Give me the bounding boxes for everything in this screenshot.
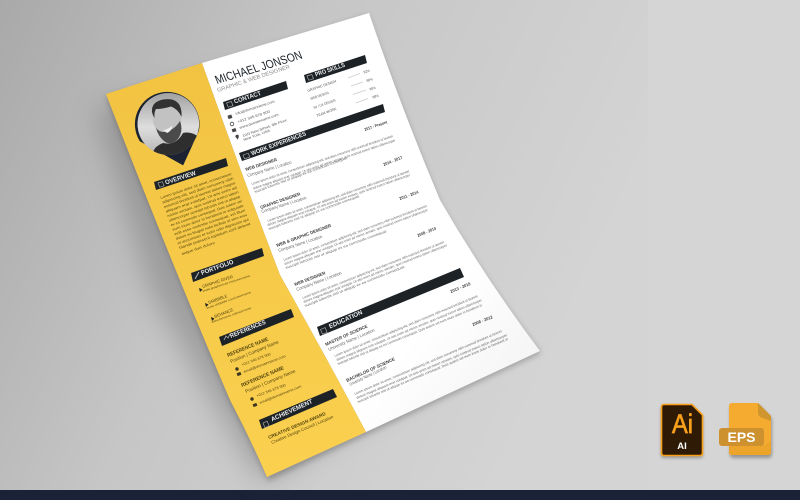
job 1: dolore magna aliquam erat volutpat. Ut wisi enim ad minim veniam, quis nostrud exerci tation ullamcorper	[252, 138, 397, 190]
reference 2	[241, 365, 302, 407]
sweater	[154, 132, 197, 155]
job 3: Company Name | Location	[278, 234, 323, 253]
job 3: dolore magna aliquam erat volutpat. Ut wisi enim ad minim veniam, quis nostrud exerci tation ullamcorper	[284, 208, 429, 266]
overview paragraph: velit esse molestie consequat, vel illum	[173, 209, 246, 236]
job 4: suscipit lobortis nisl ut aliquip ex ea commodo consequat.	[304, 265, 406, 308]
header: name: MICHAEL JONSON	[213, 48, 304, 87]
paper soft shadow	[96, 60, 460, 482]
work experiences heading: WORK EXPERIENCES	[250, 131, 308, 157]
contact address: 10/3 New Street, 8th Floor	[242, 118, 288, 138]
reference 1: REFERENCE NAME	[227, 337, 270, 359]
icon: person	[158, 182, 164, 187]
degree 1: MASTER OF SCIENCE	[325, 324, 368, 347]
skill labels	[307, 79, 338, 118]
job 2: 2014 - 2017	[383, 155, 403, 167]
icon: handshake	[224, 334, 230, 340]
portfolio items: www.graphicriver.net/username	[202, 274, 251, 293]
job 2: Lorem ipsum dolor sit amet, consectetuer adipiscing elit, sed diam nonummy nibh euismod tincidunt ut laoreet	[267, 170, 410, 223]
hair	[152, 99, 182, 118]
job 1: WEB DESIGNER	[245, 157, 278, 172]
icon: EPS file	[719, 403, 772, 458]
job 4: Lorem ipsum dolor sit amet, consectetuer adipiscing elit, sed diam nonummy nibh euismod tincidunt ut laoreet	[302, 240, 445, 300]
overview section	[154, 158, 252, 256]
overview paragraph: adipiscing elit, sed diam nonummy nibh	[162, 177, 234, 204]
degree 1: suscipit lobortis nisl ut aliquip ex ea commodo consequat. Duis autem vel eum iriure dolor in hendrerit in	[337, 303, 483, 366]
overview paragraph: et accumsan et iusto odio dignissim qui	[177, 218, 250, 245]
job 4: dolore magna aliquam erat volutpat. Ut wisi enim ad minim veniam, quis nostrud exerci tation ullamcorper	[303, 243, 448, 304]
icon: contact	[226, 101, 233, 107]
degree 1: University Name | Location	[328, 327, 376, 352]
overview heading: OVERVIEW	[164, 170, 198, 186]
award title: CREATIVE DESIGN AWARD	[268, 411, 327, 441]
overview paragraph: dolore eu feugiat nulla facilisis at vero eros	[175, 213, 248, 241]
job 3: 2011 - 2014	[399, 190, 420, 201]
job 2: GRAPHIC DESIGNER	[260, 191, 302, 210]
paper: white column	[202, 13, 540, 432]
portfolio items: www.dribbble.com/username	[206, 290, 252, 310]
icon: briefcase	[243, 153, 250, 159]
skill percentages: 80%	[366, 77, 374, 83]
degree 2: BACHELOR OF SCIENCE	[346, 356, 396, 383]
paper: yellow sidebar	[106, 63, 366, 477]
job 2	[260, 155, 411, 231]
reference 1: +012 345 678 900	[241, 352, 271, 367]
job 4: WEB DESIGNER	[294, 270, 327, 287]
icon: award	[263, 421, 269, 428]
job 2: dolore magna aliquam erat volutpat. Ut wisi enim ad minim veniam, quis nostrud exerci tation ullamcorper	[267, 173, 411, 227]
job 4: 2008 - 2010	[416, 226, 437, 238]
portfolio heading: PORTFOLIO	[200, 259, 235, 277]
overview paragraph: augue duis dolore	[181, 241, 216, 256]
achievement section	[259, 389, 337, 445]
skill percentages: 92%	[363, 69, 371, 74]
references bar	[219, 309, 294, 346]
education section	[317, 268, 509, 404]
pin outline	[135, 92, 199, 165]
smile	[163, 126, 172, 133]
degree 2: University Name | Location	[349, 364, 388, 387]
footer bar	[0, 490, 800, 500]
pro skills section	[304, 55, 380, 118]
skill meters	[348, 74, 368, 103]
job 1	[245, 120, 397, 194]
reference 1	[227, 337, 286, 376]
job 1: Lorem ipsum dolor sit amet, consectetuer adipiscing elit, sed diam nonummy nibh euismod tincidunt ut laoreet	[251, 134, 393, 186]
skill percentages: 95%	[369, 86, 377, 91]
icon: contact glyphs	[227, 114, 239, 140]
reference 2: email@domainname.com	[259, 384, 302, 405]
contact heading: CONTACT	[233, 90, 262, 105]
portfolio bar	[191, 248, 264, 282]
skill labels: GRAPHIC DESIGN	[307, 79, 337, 93]
portfolio items: GRAPHIC RIVER	[202, 274, 234, 289]
pro skills heading: PRO SKILLS	[314, 62, 347, 78]
award location: Creative Design Council | Location	[271, 414, 334, 445]
overview paragraph: blandit praesent luptatum zzril delenit	[179, 222, 252, 250]
degree 2: suscipit lobortis nisl ut aliquip ex ea commodo consequat. Duis autem vel eum iriure dolor in hendrerit in	[357, 337, 509, 404]
references section	[219, 309, 302, 407]
degree 1: dolore magna aliquam erat volutpat. Ut wisi enim ad minim veniam, quis nostrud exerci tation ullamcorper	[336, 298, 483, 362]
job 3: suscipit lobortis nisl ut aliquip ex ea commodo consequat.	[285, 229, 388, 270]
reference 2: REFERENCE NAME	[241, 365, 285, 389]
contact email: info@domainname.com	[235, 100, 275, 116]
portfolio items: www.behance.net/username	[211, 306, 252, 324]
skill percentages	[363, 69, 380, 99]
reference 2: Position | Company Name	[245, 368, 297, 395]
overview paragraph: ullamcorper suscipit lobortis nisl ut aliquip	[168, 195, 241, 223]
icon: Adobe Illustrator file: AI	[677, 441, 687, 452]
achievement bar	[259, 389, 337, 429]
overview paragraph	[160, 172, 252, 256]
reference 1: Position | Company Name	[230, 339, 280, 365]
EPS label text: EPS	[727, 429, 756, 445]
overview bar	[154, 158, 228, 190]
contact city: New York, USA	[243, 129, 271, 142]
face	[153, 116, 181, 132]
portfolio items	[199, 274, 252, 324]
reference 2: +012 345 678 900	[256, 383, 286, 398]
job 2: suscipit lobortis nisl ut aliquip ex ea commodo consequat.	[268, 194, 361, 231]
job 1: 2017 - Present	[364, 120, 388, 132]
job 3: WEB & GRAPHIC DESIGNER	[276, 223, 332, 248]
overview paragraph: ex ea commodo consequat. Duis autem vel	[170, 199, 243, 227]
degree 2: Lorem ipsum dolor sit amet, consectetuer adipiscing elit, sed diam nonummy nibh euismod tincidunt ut laoreet	[354, 329, 502, 396]
job 1: suscipit lobortis nisl ut aliquip ex ea commodo consequat.	[254, 156, 348, 194]
skill labels: TEAM WORK	[316, 107, 338, 118]
contact phone: +012 345 678 900	[237, 110, 271, 124]
reference 1: email@domainname.com	[243, 354, 286, 374]
portfolio section	[191, 248, 264, 324]
beard	[156, 121, 181, 143]
contact web: www.domainname.com	[239, 113, 279, 130]
EPS label band	[719, 428, 764, 446]
overview paragraph: eum iriure dolor in hendrerit in vulputate	[172, 204, 244, 232]
skill labels: WEB DESIGN	[310, 91, 330, 101]
degree 2: dolore magna aliquam erat volutpat. Ut wisi enim ad minim veniam, quis nostrud exerci tation ullamcorper	[356, 333, 508, 400]
job 1: Company Name | Location	[247, 160, 293, 178]
work experiences bar	[239, 104, 385, 161]
overview paragraph: Lorem ipsum dolor sit amet, consectetuer	[160, 172, 233, 200]
degree 2: 2008 - 2012	[472, 314, 494, 327]
overview paragraph: euismod tincidunt ut laoreet dolore magna	[163, 181, 237, 209]
icon: pencil	[195, 272, 199, 279]
portfolio items: BEHANCE	[214, 307, 234, 319]
icon: education	[320, 328, 327, 334]
work experiences section	[239, 104, 448, 308]
resume sheet	[106, 13, 540, 477]
degree 1: Lorem ipsum dolor sit amet, consectetuer adipiscing elit, sed diam nonummy nibh euismod tincidunt ut laoreet	[334, 294, 478, 358]
EPS lower shade	[729, 440, 771, 455]
overview paragraph: aliquam erat volutpat. Ut wisi enim ad	[165, 186, 237, 213]
pro skills bar	[304, 55, 367, 83]
contact section	[223, 81, 288, 142]
icon: Adobe Illustrator file: Ai	[672, 409, 693, 439]
EPS page fold	[758, 403, 771, 421]
portrait pin	[135, 90, 203, 165]
skill percentages: 98%	[372, 94, 380, 99]
right panel	[648, 0, 800, 490]
job 3: Lorem ipsum dolor sit amet, consectetuer adipiscing elit, sed diam nonummy nibh euismod tincidunt ut laoreet	[283, 204, 427, 262]
portrait photo	[138, 93, 200, 155]
job 4: Company Name | Location	[296, 270, 343, 292]
icon: skills	[307, 74, 314, 80]
education heading: EDUCATION	[328, 309, 364, 330]
job 2: Company Name | Location	[261, 195, 308, 214]
achievement heading: ACHIEVEMENT	[270, 398, 314, 423]
icon: Adobe Illustrator file	[661, 404, 703, 458]
degree 1: 2013 - 2015	[450, 281, 472, 294]
header: job title: GRAPHIC & WEB DESIGNER	[217, 65, 291, 94]
skill labels: S4 / UX DESIGN	[313, 98, 336, 110]
references heading: REFERENCES	[229, 319, 267, 340]
paper contact shadow	[106, 15, 541, 481]
overview paragraph: minim veniam, quis nostrud exerci tation	[167, 190, 239, 218]
background	[0, 0, 648, 490]
contact bar	[223, 81, 288, 110]
portfolio items: DRIBBBLE	[208, 293, 228, 305]
education bar	[317, 268, 464, 336]
